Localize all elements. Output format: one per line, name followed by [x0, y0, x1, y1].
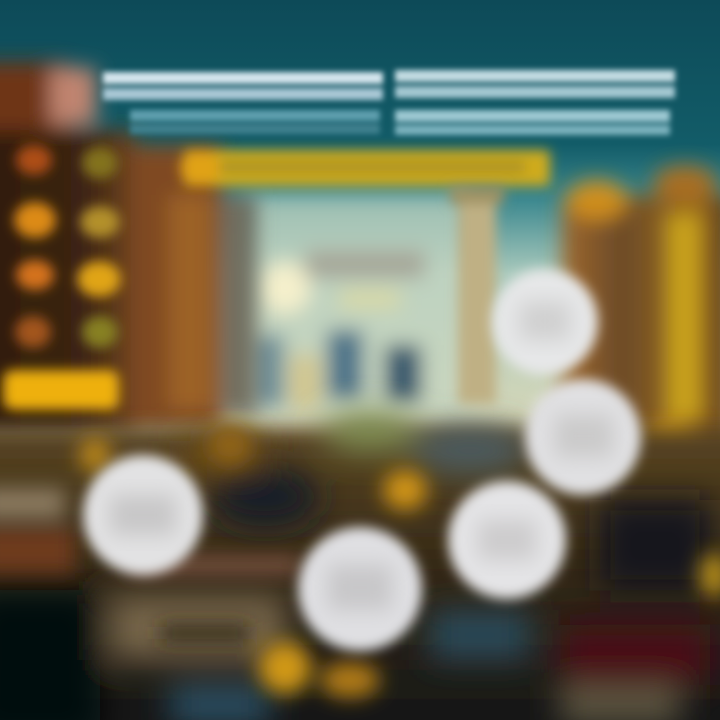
central skyline: [245, 195, 470, 420]
circle 5: [492, 269, 598, 375]
circle 4: [525, 379, 641, 495]
pillar: [450, 186, 504, 404]
title block: [103, 70, 675, 135]
window lights: [3, 145, 121, 410]
left building: [0, 62, 256, 435]
right building: [562, 165, 720, 467]
circle 2: [298, 527, 422, 651]
circle 1: [83, 455, 203, 575]
circle 3: [448, 481, 566, 599]
ground and street: [0, 412, 720, 720]
yellow banner: [180, 150, 550, 186]
